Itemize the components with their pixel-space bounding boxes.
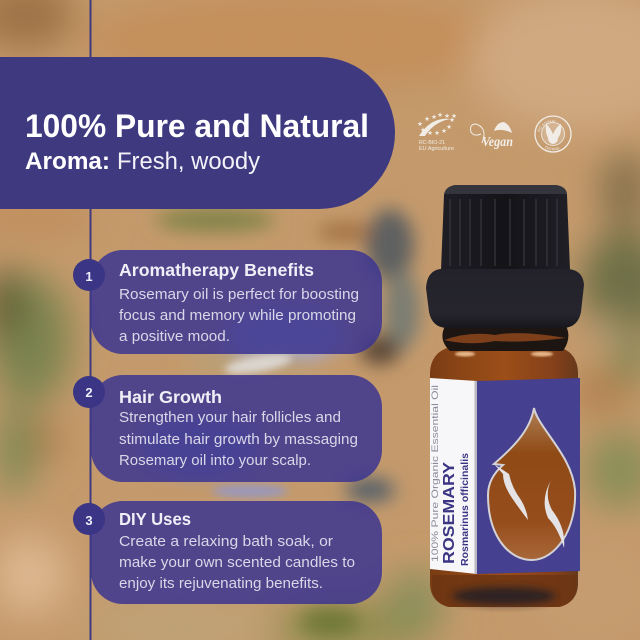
body text: enjoy its rejuvenating benefits. (119, 575, 323, 592)
body text: a positive mood. (119, 328, 230, 345)
number badge 3 (73, 503, 105, 535)
body text: Strengthen your hair follicles and (119, 409, 341, 426)
body text: Create a relaxing bath soak, or (119, 533, 333, 550)
icon: EU organic badge: ★ (451, 112, 457, 120)
body text (119, 286, 359, 345)
heading: Hair Growth (119, 387, 222, 407)
timeline vertical line (90, 0, 92, 640)
icon: EU organic badge: ★ (417, 120, 423, 128)
label text: Rosmarinus officinalis (459, 453, 471, 566)
icon: oil drop (488, 408, 575, 560)
number badge 2 (73, 376, 105, 408)
icon: vegan badge (471, 122, 513, 150)
body text: Rosemary oil into your scalp. (119, 452, 311, 469)
label text: ROSEMARY (441, 462, 458, 564)
icon: EU organic badge: ★ (420, 126, 426, 134)
icon: EU organic badge: ★ (431, 113, 437, 121)
icon: EU organic badge: ★ (444, 112, 450, 120)
label text (430, 385, 471, 566)
icon: EU organic badge: ★ (437, 111, 443, 119)
icon: vegan badge: Vegan (482, 135, 513, 150)
icon: EU organic badge: ★ (434, 129, 440, 137)
product bottle (426, 185, 584, 607)
icon: EU organic badge: EU Agriculture (419, 146, 454, 152)
neck ring (442, 326, 568, 351)
header panel (0, 57, 395, 209)
body text: make your own scented candles to (119, 554, 355, 571)
number badge 1: 1 (85, 269, 93, 284)
cap skirt (426, 269, 584, 328)
heading: DIY Uses (119, 509, 191, 529)
panel: aromatherapy benefits (91, 250, 382, 354)
icon: no animal testing badge: NO ANIMAL (537, 120, 556, 132)
title: 100% Pure and Natural (25, 108, 369, 144)
body text: focus and memory while promoting (119, 307, 356, 324)
body text: stimulate hair growth by massaging (119, 431, 358, 448)
body text (119, 533, 355, 592)
aroma value: Fresh, woody (117, 148, 260, 175)
number badge 2: 2 (85, 385, 93, 400)
icon: EU organic badge: ★ (424, 115, 430, 123)
bottle glass (430, 348, 578, 607)
icon: EU organic badge: RC-BIO-21 (419, 140, 445, 146)
number badge 1 (73, 259, 105, 291)
body text: Rosemary oil is perfect for boosting (119, 286, 359, 303)
icon: EU organic badge: ★ (449, 116, 455, 124)
panel: hair growth (91, 375, 382, 482)
icon: no animal testing badge (534, 115, 572, 153)
icon: no animal testing badge: TESTING (545, 146, 560, 150)
heading: Aromatherapy Benefits (119, 260, 314, 280)
icon: EU organic badge: ★ (441, 127, 447, 135)
label white strip (430, 378, 477, 574)
body text (119, 409, 358, 469)
number badge 3: 3 (85, 513, 93, 528)
aroma line: Aroma: (25, 148, 110, 175)
icon: EU organic badge (417, 111, 457, 152)
icon: EU organic badge: ★ (446, 123, 452, 131)
cap ribbed top (441, 185, 570, 270)
label purple (477, 378, 580, 574)
icon: EU organic badge: ★ (427, 129, 433, 137)
label text: 100% Pure Organic Essential Oil (430, 385, 440, 562)
panel: DIY uses (91, 501, 382, 604)
